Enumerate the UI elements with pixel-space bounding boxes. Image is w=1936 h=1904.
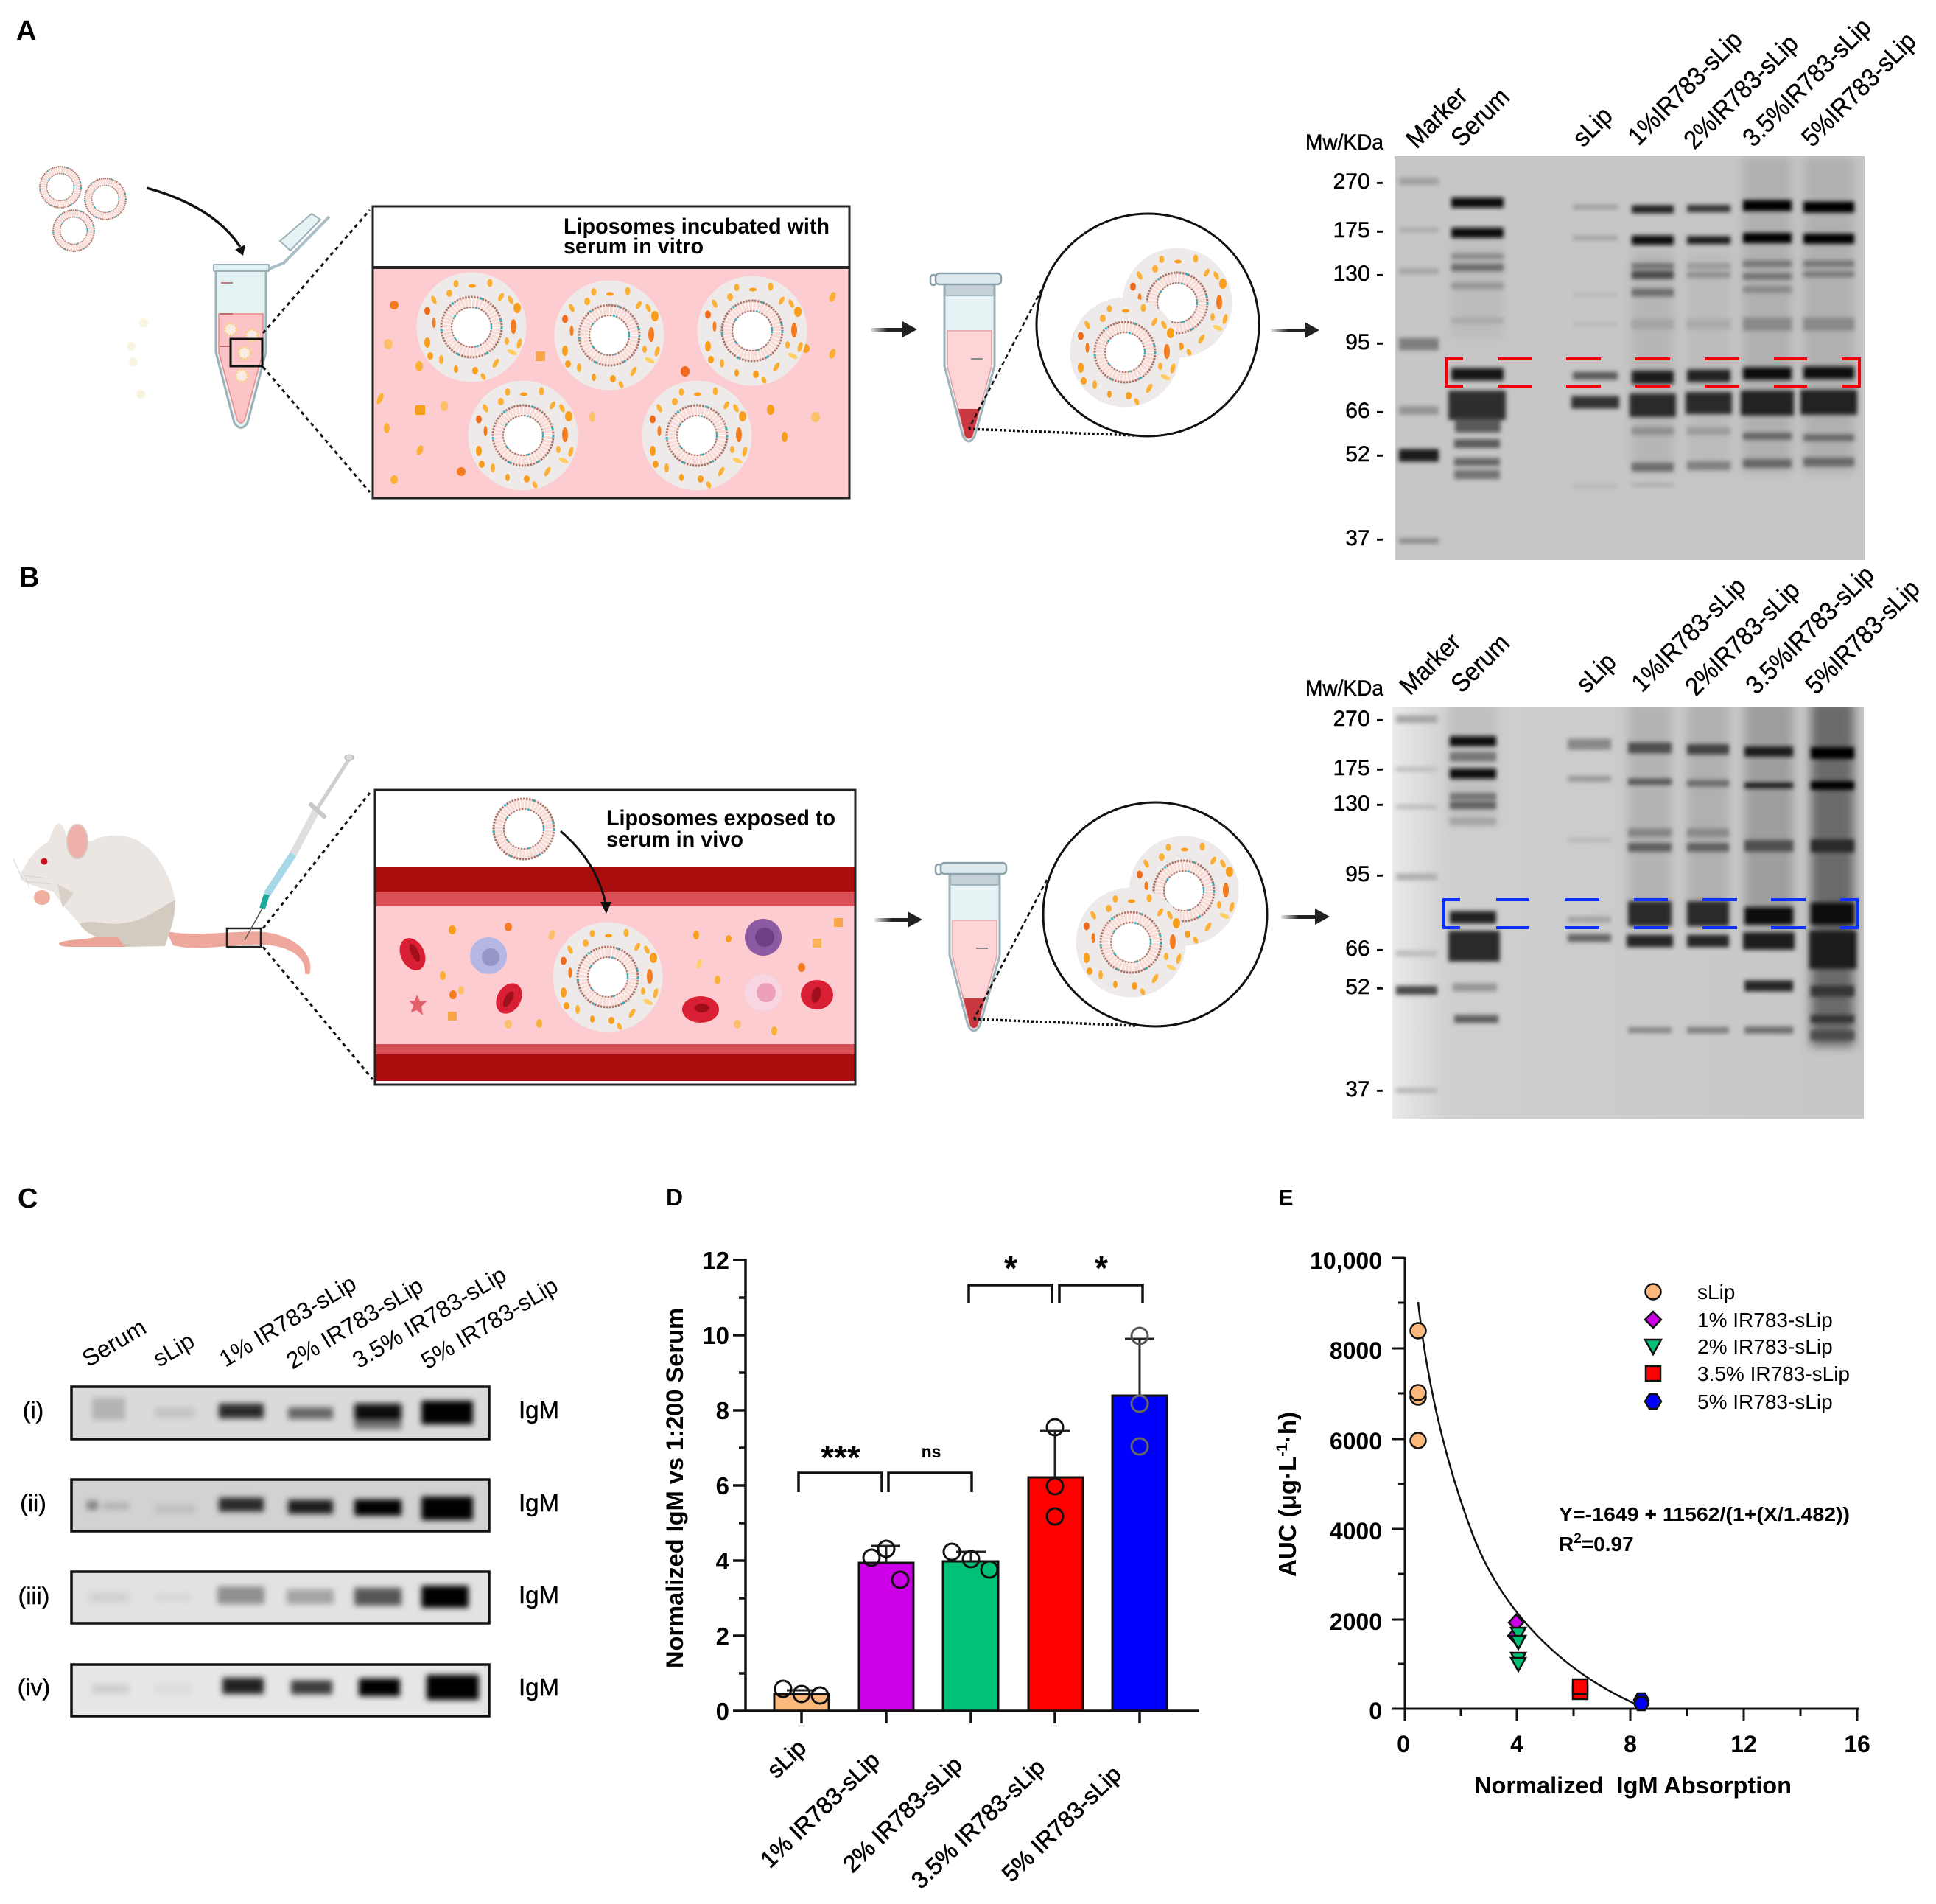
zoom line: [974, 880, 1047, 1019]
panel label A: A: [16, 15, 36, 46]
row labels: (ii): [20, 1490, 46, 1516]
weight markers: 37 -: [1345, 1077, 1383, 1102]
weight markers: 52 -: [1345, 442, 1383, 466]
lane labels: 1% IR783-sLip: [214, 1270, 361, 1372]
x tick labels: 8: [1624, 1731, 1637, 1757]
gel A labels: [1305, 13, 1922, 550]
zoom lines to circle: [969, 290, 1042, 429]
fit equation: [1559, 1503, 1850, 1555]
weight markers: 95 -: [1345, 330, 1383, 354]
lane labels: 1%IR783-sLip: [1623, 26, 1748, 151]
y tick labels: [702, 1247, 730, 1725]
data: 5%: [1634, 1693, 1649, 1710]
caption: serum in vivo: [606, 827, 743, 852]
zoom line: [974, 1019, 1135, 1026]
IgM labels: IgM: [519, 1581, 559, 1609]
red dashed highlight: [1446, 359, 1859, 386]
y tick labels: 8000: [1330, 1337, 1382, 1364]
lane 5%: [1800, 207, 1857, 462]
free serum proteins: [440, 918, 843, 1035]
y tick labels: 8: [716, 1397, 729, 1424]
lane labels: 1%IR783-sLip: [1627, 573, 1752, 698]
IgM labels: [519, 1396, 559, 1701]
icon: liposome 3: [53, 210, 94, 251]
legend: 3.5% IR783-sLip: [1697, 1362, 1850, 1385]
lane labels: 5%IR783-sLip: [1800, 575, 1926, 700]
lane labels: 3.5%IR783-sLip: [1738, 13, 1877, 153]
lane 3.5%: [1743, 752, 1795, 1030]
lane labels: 3.5%IR783-sLip: [1741, 561, 1880, 700]
fit equation: Y=-1649 + 11562/(1+(X/1.482)): [1559, 1503, 1850, 1525]
significance brackets: [799, 1285, 1143, 1492]
fit curve: [1418, 1302, 1641, 1707]
y axis title: -1: [1274, 1443, 1291, 1457]
icon: liposome 2: [85, 178, 126, 220]
data: 2%: [1511, 1628, 1526, 1671]
arrow: liposomes into tube: [147, 188, 245, 256]
weight markers: 66 -: [1345, 937, 1383, 961]
significance labels: ns: [922, 1442, 941, 1461]
y tick labels: 4: [716, 1547, 730, 1575]
IgM labels: IgM: [519, 1489, 559, 1516]
blue dashed highlight: [1444, 900, 1857, 928]
white blood cells: [470, 919, 782, 1011]
panel E: scatter with fit: [1274, 1247, 1870, 1799]
circle inset: [1043, 802, 1267, 1026]
fit equation: =0.97: [1582, 1533, 1634, 1555]
circle inset: pelleted coronas: [1037, 214, 1259, 436]
weight markers: 270 -: [1333, 707, 1383, 731]
weight markers: [1333, 707, 1383, 1102]
lane labels: Marker: [1401, 82, 1473, 154]
x labels: 3.5% IR783-sLip: [906, 1754, 1050, 1894]
zoom lines to circle: [969, 429, 1135, 435]
lane labels: 2%IR783-sLip: [1679, 29, 1804, 155]
lane labels: 2% IR783-sLip: [281, 1272, 428, 1374]
row labels: [18, 1397, 50, 1701]
y tick labels: 0: [716, 1698, 729, 1725]
corona liposome: [469, 380, 578, 491]
lane 2%: [1687, 749, 1729, 1030]
arrow: [1281, 909, 1330, 925]
arrow: [871, 321, 917, 337]
lane labels: sLip: [1571, 648, 1622, 699]
x labels: 2% IR783-sLip: [838, 1751, 967, 1877]
lane 1%: [1630, 209, 1676, 485]
arrow: [1271, 322, 1319, 338]
legend: [1645, 1281, 1850, 1413]
data: 1%: [1508, 1614, 1523, 1644]
bars: [774, 1396, 1167, 1711]
axes: [733, 1259, 1199, 1723]
molecular weight header: Mw/KDa: [1305, 676, 1383, 701]
y tick labels: 10,000: [1310, 1247, 1382, 1274]
faint specks: [127, 318, 148, 399]
lane 1%: [1627, 748, 1673, 1030]
zoom lines tube to panel: [263, 210, 370, 492]
weight markers: 175 -: [1333, 218, 1383, 242]
lane marker: [1396, 719, 1437, 1091]
x labels: [755, 1734, 1126, 1894]
corona liposome: [697, 276, 807, 386]
lane labels: sLip: [148, 1327, 199, 1372]
panel caption: serum in vitro: [564, 234, 704, 259]
y tick labels: 6000: [1330, 1428, 1382, 1455]
data points: [775, 1328, 1148, 1704]
zoom lines mouse to panel: [263, 793, 373, 1079]
lane labels: [77, 1261, 563, 1374]
blot ii: [71, 1480, 489, 1531]
weight markers: 52 -: [1345, 975, 1383, 999]
corona liposome: [554, 280, 664, 391]
lane smears: [1451, 156, 1854, 473]
lane 2%: [1686, 209, 1732, 466]
x axis title: Normalized IgM Absorption: [1474, 1772, 1792, 1799]
y tick labels: 4000: [1330, 1518, 1382, 1544]
lane serum: [1448, 741, 1500, 1019]
gel A: [1395, 156, 1865, 560]
panel B: in vivo schematic: [13, 755, 1330, 1085]
y tick labels: 0: [1369, 1698, 1382, 1724]
panel C: western blots: [18, 1261, 563, 1716]
panel A: in vitro schematic: [40, 167, 1319, 498]
fit equation: R: [1559, 1533, 1574, 1555]
blot i: [71, 1387, 489, 1439]
weight markers: 175 -: [1333, 756, 1383, 780]
corona liposome: [417, 273, 526, 382]
lane labels: sLip: [1568, 102, 1618, 153]
lane labels: 3.5% IR783-sLip: [348, 1261, 511, 1373]
icon: pelleted tube: [936, 863, 1006, 1031]
lane marker: [1399, 181, 1439, 541]
y tick labels: 10: [702, 1322, 729, 1349]
weight markers: 130 -: [1333, 791, 1383, 816]
liposome entering: [494, 799, 554, 859]
icon: mouse: [13, 823, 310, 974]
x tick labels: 0: [1397, 1731, 1410, 1757]
icon: tail box: [227, 928, 261, 947]
significance labels: [821, 1249, 1108, 1477]
row labels: (i): [23, 1397, 43, 1424]
lane labels: [1401, 13, 1922, 155]
x tick labels: [1397, 1731, 1870, 1757]
lane labels: 5% IR783-sLip: [416, 1272, 563, 1374]
significance labels: *: [1095, 1249, 1108, 1287]
lane 5%: [1809, 753, 1856, 1035]
caption: Liposomes exposed to: [606, 806, 835, 830]
gel B: [1392, 700, 1864, 1119]
x labels: 5% IR783-sLip: [997, 1760, 1126, 1887]
weight markers: 95 -: [1345, 862, 1383, 886]
blot iii: [71, 1572, 489, 1623]
lane smears: [1450, 700, 1854, 1046]
corona liposome: [553, 923, 663, 1032]
y tick labels: 12: [702, 1247, 729, 1274]
incubation panel: [373, 206, 849, 498]
icon: three liposomes: [40, 167, 81, 208]
lane sLip: [1568, 744, 1611, 938]
row labels: (iv): [18, 1674, 50, 1701]
icon: pelleted tube: [930, 273, 1001, 441]
y tick labels: 2: [716, 1623, 729, 1650]
lane labels: Marker: [1395, 629, 1467, 701]
data: sLip: [1410, 1323, 1426, 1449]
weight markers: [1333, 169, 1383, 550]
lane labels: Serum: [1446, 83, 1515, 153]
axes: [1392, 1257, 1859, 1721]
y tick labels: 2000: [1330, 1609, 1382, 1635]
y axis title: Normalized IgM vs 1:200 Serum: [662, 1308, 688, 1668]
weight markers: 37 -: [1345, 526, 1383, 550]
lane sLip: [1571, 207, 1619, 486]
corona liposome: [642, 380, 751, 491]
x labels: sLip: [762, 1734, 811, 1783]
panel label C: C: [18, 1183, 38, 1214]
panel caption: Liposomes incubated with: [564, 214, 830, 239]
IgM labels: IgM: [519, 1673, 559, 1701]
y axis title: AUC (μg·L: [1274, 1457, 1301, 1577]
lane labels: 2%IR783-sLip: [1680, 576, 1806, 701]
weight markers: 270 -: [1333, 169, 1383, 194]
platelet: [409, 995, 427, 1015]
icon: open tube with serum: [214, 214, 329, 427]
panel label D: D: [666, 1184, 683, 1211]
gel B labels: [1305, 561, 1926, 1102]
y tick labels: 6: [716, 1472, 729, 1499]
icon: syringe: [245, 755, 354, 940]
panel label E: E: [1279, 1186, 1293, 1210]
fit equation: 2: [1574, 1531, 1582, 1547]
x tick labels: 4: [1510, 1731, 1523, 1757]
free serum proteins: [375, 291, 837, 484]
error bars: [787, 1339, 1154, 1690]
legend: 5% IR783-sLip: [1697, 1390, 1833, 1413]
significance labels: ***: [821, 1438, 860, 1477]
y axis title: ·h): [1274, 1412, 1301, 1443]
data: 3.5%: [1573, 1679, 1588, 1699]
panel label B: B: [19, 562, 39, 593]
blot iv: [71, 1665, 489, 1716]
panel D: bar chart: [662, 1247, 1199, 1894]
weight markers: 130 -: [1333, 262, 1383, 286]
IgM labels: IgM: [519, 1396, 559, 1424]
lane labels: 5%IR783-sLip: [1797, 27, 1922, 153]
arrow: [874, 911, 922, 928]
x tick labels: 12: [1730, 1731, 1757, 1757]
lane labels: [1395, 561, 1926, 701]
molecular weight header: Mw/KDa: [1305, 130, 1383, 155]
weight markers: 66 -: [1345, 399, 1383, 423]
red blood cells: [395, 934, 833, 1023]
row labels: (iii): [18, 1583, 49, 1609]
legend: 1% IR783-sLip: [1697, 1309, 1833, 1331]
legend: sLip: [1697, 1281, 1735, 1303]
x tick labels: 16: [1844, 1731, 1870, 1757]
y tick labels: [1310, 1247, 1382, 1724]
blood vessel panel: [374, 790, 855, 1085]
significance labels: *: [1004, 1249, 1017, 1287]
lane serum: [1448, 203, 1506, 475]
lane 3.5%: [1741, 206, 1794, 463]
x labels: 1% IR783-sLip: [755, 1746, 885, 1873]
legend: 2% IR783-sLip: [1697, 1335, 1833, 1358]
arrow: [561, 831, 611, 914]
lane labels: Serum: [1446, 629, 1515, 699]
lane labels: Serum: [77, 1314, 150, 1372]
